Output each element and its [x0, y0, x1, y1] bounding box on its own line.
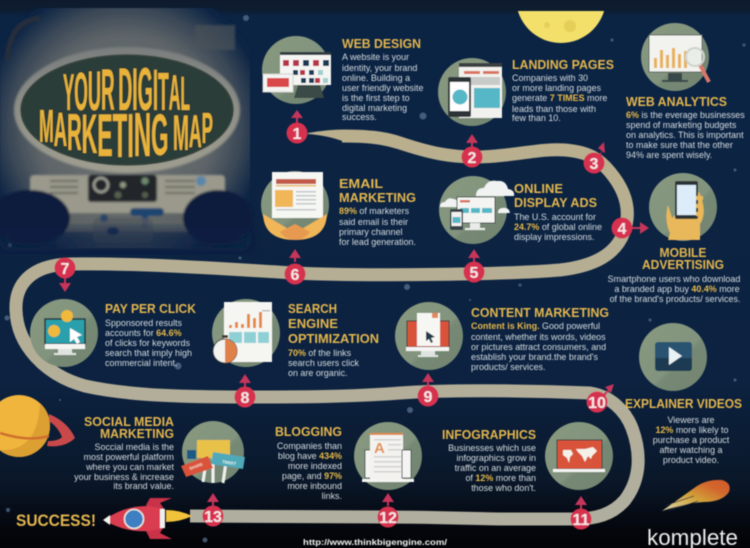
body text: generate 7 TIMES more — [512, 93, 607, 103]
title: M — [173, 105, 189, 161]
body text: products/ services. — [471, 362, 546, 372]
title: T — [113, 102, 127, 171]
heading: EMAIL — [339, 176, 383, 191]
section 10: explainer videos — [625, 323, 742, 465]
markers — [54, 122, 632, 530]
body text: your business & increase — [74, 472, 174, 482]
body text: for lead generation. — [339, 237, 416, 247]
body text: search that imply high — [105, 348, 192, 358]
icon: blogging — [354, 422, 422, 490]
body text: 89% of marketers — [339, 206, 409, 216]
body text: those who don't. — [471, 483, 536, 493]
section 7: pay per click — [30, 299, 197, 368]
body text: Companies with 30 — [512, 73, 588, 83]
body text: commercial intent. — [105, 358, 178, 368]
body text: Spponsored results — [105, 318, 183, 328]
body text: success. — [342, 112, 377, 122]
icon: blogging: A — [374, 440, 385, 457]
body text: of clicks for keywords — [105, 338, 190, 348]
section 13: social media marketing — [74, 414, 245, 491]
body text: on analytics. This is important — [626, 130, 744, 140]
heading line 2: ENGINE — [288, 316, 338, 331]
body text: Content is King. Good powerful — [471, 321, 600, 331]
title — [39, 56, 213, 171]
heading: MOBILE — [660, 245, 707, 260]
heading: SEARCH — [288, 301, 337, 316]
icon: email marketing — [261, 171, 329, 240]
panel: cockpit with title — [0, 8, 253, 250]
heading: SOCIAL MEDIA — [84, 414, 175, 429]
heading: PAY PER CLICK — [105, 301, 197, 316]
title: N — [134, 101, 151, 170]
section 4: mobile advertising — [608, 173, 740, 304]
title: R — [67, 104, 82, 162]
body text: of 12% more than — [465, 473, 536, 483]
body text: said email is their — [339, 217, 408, 227]
marker numbers: 12 — [379, 510, 397, 527]
body text: to make sure that the other — [626, 140, 733, 150]
body text: or more landing pages — [512, 83, 601, 93]
icon: infographics — [545, 422, 613, 490]
body text: 6% is the everage businesses — [626, 110, 745, 120]
marker numbers: 4 — [618, 221, 627, 238]
marker numbers: 1 — [293, 126, 302, 143]
body text: a branded app buy 40.4% more — [614, 284, 740, 294]
heading line 2: ADVERTISING — [642, 257, 724, 272]
heading line 2: MARKETING — [100, 426, 174, 441]
body text: or pictures attract consumers, and — [471, 342, 606, 352]
marker numbers: 11 — [573, 512, 590, 529]
title: G — [151, 103, 169, 168]
comet — [662, 480, 730, 511]
section 2: landing pages — [438, 57, 614, 126]
marker numbers: 13 — [204, 509, 222, 526]
body text: identity, your brand — [342, 63, 417, 73]
section 1: web design — [262, 36, 423, 122]
section 5: online display ads — [439, 176, 602, 244]
numbered markers and arrows — [54, 110, 649, 530]
marker numbers: 5 — [470, 265, 479, 282]
body text: 24.7% of global online — [514, 222, 602, 232]
section 3: web analytics — [626, 23, 745, 160]
icon: search engine optimization — [212, 299, 280, 367]
arrows — [59, 110, 649, 509]
title: A — [54, 104, 67, 157]
road — [16, 130, 638, 519]
title: K — [82, 102, 97, 165]
section 9: content marketing — [395, 302, 609, 372]
body text: purchase a product — [653, 435, 730, 445]
body text: primary channel — [339, 227, 403, 237]
moon — [517, 10, 605, 44]
icon: web analytics — [641, 23, 709, 91]
body text: search users click — [288, 358, 360, 368]
section 8: search engine optimization — [212, 299, 379, 378]
body text: is the first step to — [342, 93, 410, 103]
heading: EXPLAINER VIDEOS — [625, 396, 742, 411]
icon: explainer videos — [639, 323, 707, 391]
marker numbers: 10 — [588, 395, 606, 412]
body text: its brand value. — [113, 481, 174, 491]
body text: digital marketing — [342, 103, 407, 113]
source url: http://www.thinkbigengine.com/ — [303, 537, 448, 547]
body text: Smartphone users who download — [608, 274, 740, 284]
body text: leads than those with — [512, 104, 596, 114]
marker numbers — [61, 126, 627, 529]
body text: 70% of the links — [288, 348, 351, 358]
body text: establish your brand.the brand's — [471, 352, 598, 362]
icon: content marketing — [395, 302, 463, 370]
marker numbers: 9 — [424, 389, 433, 406]
icon: mobile advertising — [649, 173, 717, 241]
success label: SUCCESS! — [16, 511, 96, 530]
heading line 2: MARKETING — [339, 190, 416, 205]
body text: user friendly website — [342, 83, 423, 93]
body text: 94% are spent wisely. — [626, 150, 712, 160]
icon: web design — [262, 36, 331, 104]
marker numbers: 8 — [241, 390, 250, 407]
icon: social media marketing: TWEET — [222, 459, 237, 466]
heading: ONLINE — [514, 181, 563, 196]
body text: spend of marketing budgets — [626, 120, 737, 130]
section 6: email marketing — [261, 171, 416, 247]
body text: 12% more likely to — [655, 425, 729, 435]
body text: most powerful platform — [84, 452, 174, 462]
title: YOUR DIGITAL — [63, 56, 190, 123]
body text: page, and 97% — [282, 471, 342, 481]
icon: pay per click — [30, 299, 98, 367]
panel: cockpit with title: P — [202, 104, 213, 153]
body text: accounts for 64.6% — [105, 328, 182, 338]
body text: more inbound — [287, 481, 342, 491]
body text: where you can market — [85, 462, 175, 472]
title: I — [127, 102, 134, 171]
marker numbers: 6 — [291, 267, 300, 284]
body text: content, whether its words, videos — [471, 332, 606, 342]
heading: CONTENT MARKETING — [471, 305, 609, 320]
marker numbers: 3 — [590, 156, 599, 173]
body text: Soccial media is the — [95, 442, 174, 452]
body text: product video. — [663, 455, 719, 465]
body text: Viewers are — [667, 415, 715, 425]
marker numbers: 2 — [468, 150, 477, 167]
body text: A website is your — [342, 52, 409, 62]
heading line 3: OPTIMIZATION — [288, 331, 379, 346]
title: M — [39, 100, 54, 152]
icon: landing pages — [438, 58, 506, 126]
body text: few than 10. — [512, 113, 561, 123]
title: E — [97, 102, 113, 169]
rocket — [103, 498, 192, 539]
icon: social media marketing — [181, 421, 245, 483]
icon: online display ads — [439, 176, 514, 244]
body text: Companies than — [277, 441, 342, 451]
heading: WEB DESIGN — [342, 36, 421, 51]
body text: on are organic. — [288, 368, 348, 378]
heading: WEB ANALYTICS — [626, 94, 727, 109]
body text: after watching a — [659, 445, 723, 455]
cockpit interior — [0, 8, 253, 250]
section 11: infographics — [442, 422, 613, 493]
body text: blog have 434% — [278, 451, 342, 461]
heading: BLOGGING — [275, 424, 342, 439]
section 12: blogging — [275, 422, 422, 501]
body text: The U.S. account for — [514, 212, 596, 222]
body text: traffic on an average — [455, 463, 536, 473]
heading: LANDING PAGES — [512, 57, 614, 72]
marker numbers: 7 — [61, 261, 70, 278]
body text: infographics grow in — [456, 453, 536, 463]
heading line 2: DISPLAY ADS — [514, 195, 597, 210]
body text: links. — [322, 491, 342, 501]
title: A — [189, 105, 202, 157]
body text: display impressions. — [514, 232, 594, 242]
planet — [0, 395, 75, 457]
body text: more indexed — [288, 461, 342, 471]
icon: social media marketing: SHARE — [189, 461, 204, 471]
body text: Businesses which use — [448, 443, 536, 453]
heading: INFOGRAPHICS — [442, 427, 536, 442]
body text: online. Building a — [342, 73, 410, 83]
body text: of the brand's products/ services. — [610, 294, 740, 304]
